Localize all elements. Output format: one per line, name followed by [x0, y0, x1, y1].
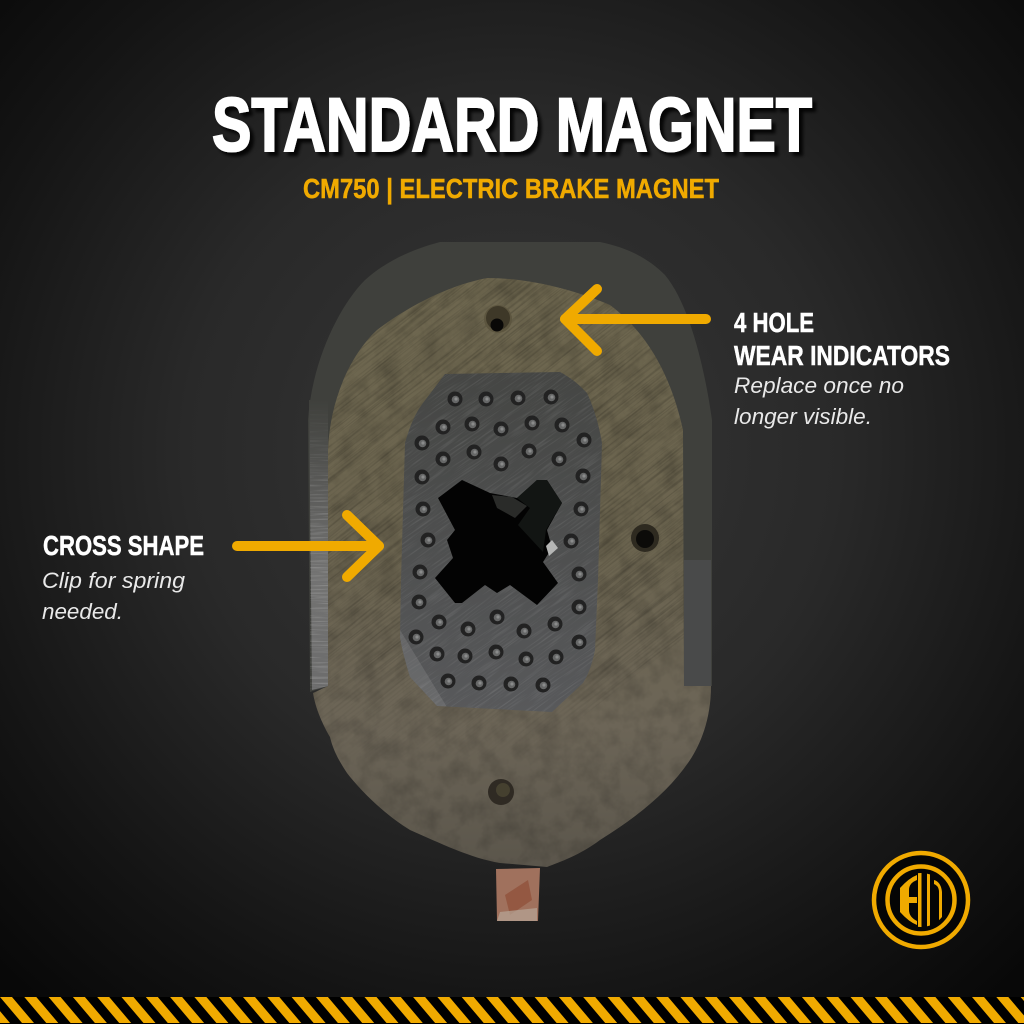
label: wear indicators: 4 HOLE [734, 307, 814, 338]
outer dark steel plate [308, 242, 712, 692]
cross shaped opening [435, 480, 562, 605]
label: cross shape: CROSS SHAPE [43, 530, 204, 561]
mounting hole: top [484, 305, 512, 333]
label: wear indicators: WEAR INDICATORS [734, 340, 950, 371]
center steel plate [400, 372, 602, 712]
copper terminal [496, 868, 540, 921]
label: wear indicators: Replace once no [734, 373, 904, 398]
left bright edge of plate [309, 400, 328, 690]
label: wear indicators [734, 307, 950, 429]
arrow: wear indicators [565, 289, 706, 351]
mounting hole: bottom [488, 779, 514, 805]
logo: CM badge [874, 853, 968, 947]
arrow: cross shape [237, 515, 379, 577]
label: wear indicators: longer visible. [734, 404, 872, 429]
hazard stripe bar [0, 997, 1024, 1024]
label: cross shape: Clip for spring [42, 568, 185, 593]
rivet dots [408, 390, 592, 692]
subtitle: CM750 | ELECTRIC BRAKE MAGNET [303, 173, 719, 204]
label: cross shape: needed. [42, 599, 123, 624]
label: cross shape [42, 530, 204, 624]
right grey edge of plate [684, 560, 711, 686]
brake magnet illustration [308, 242, 712, 921]
mounting hole: right [631, 524, 659, 552]
title: STANDARD MAGNET [212, 83, 812, 168]
friction body [313, 278, 711, 867]
